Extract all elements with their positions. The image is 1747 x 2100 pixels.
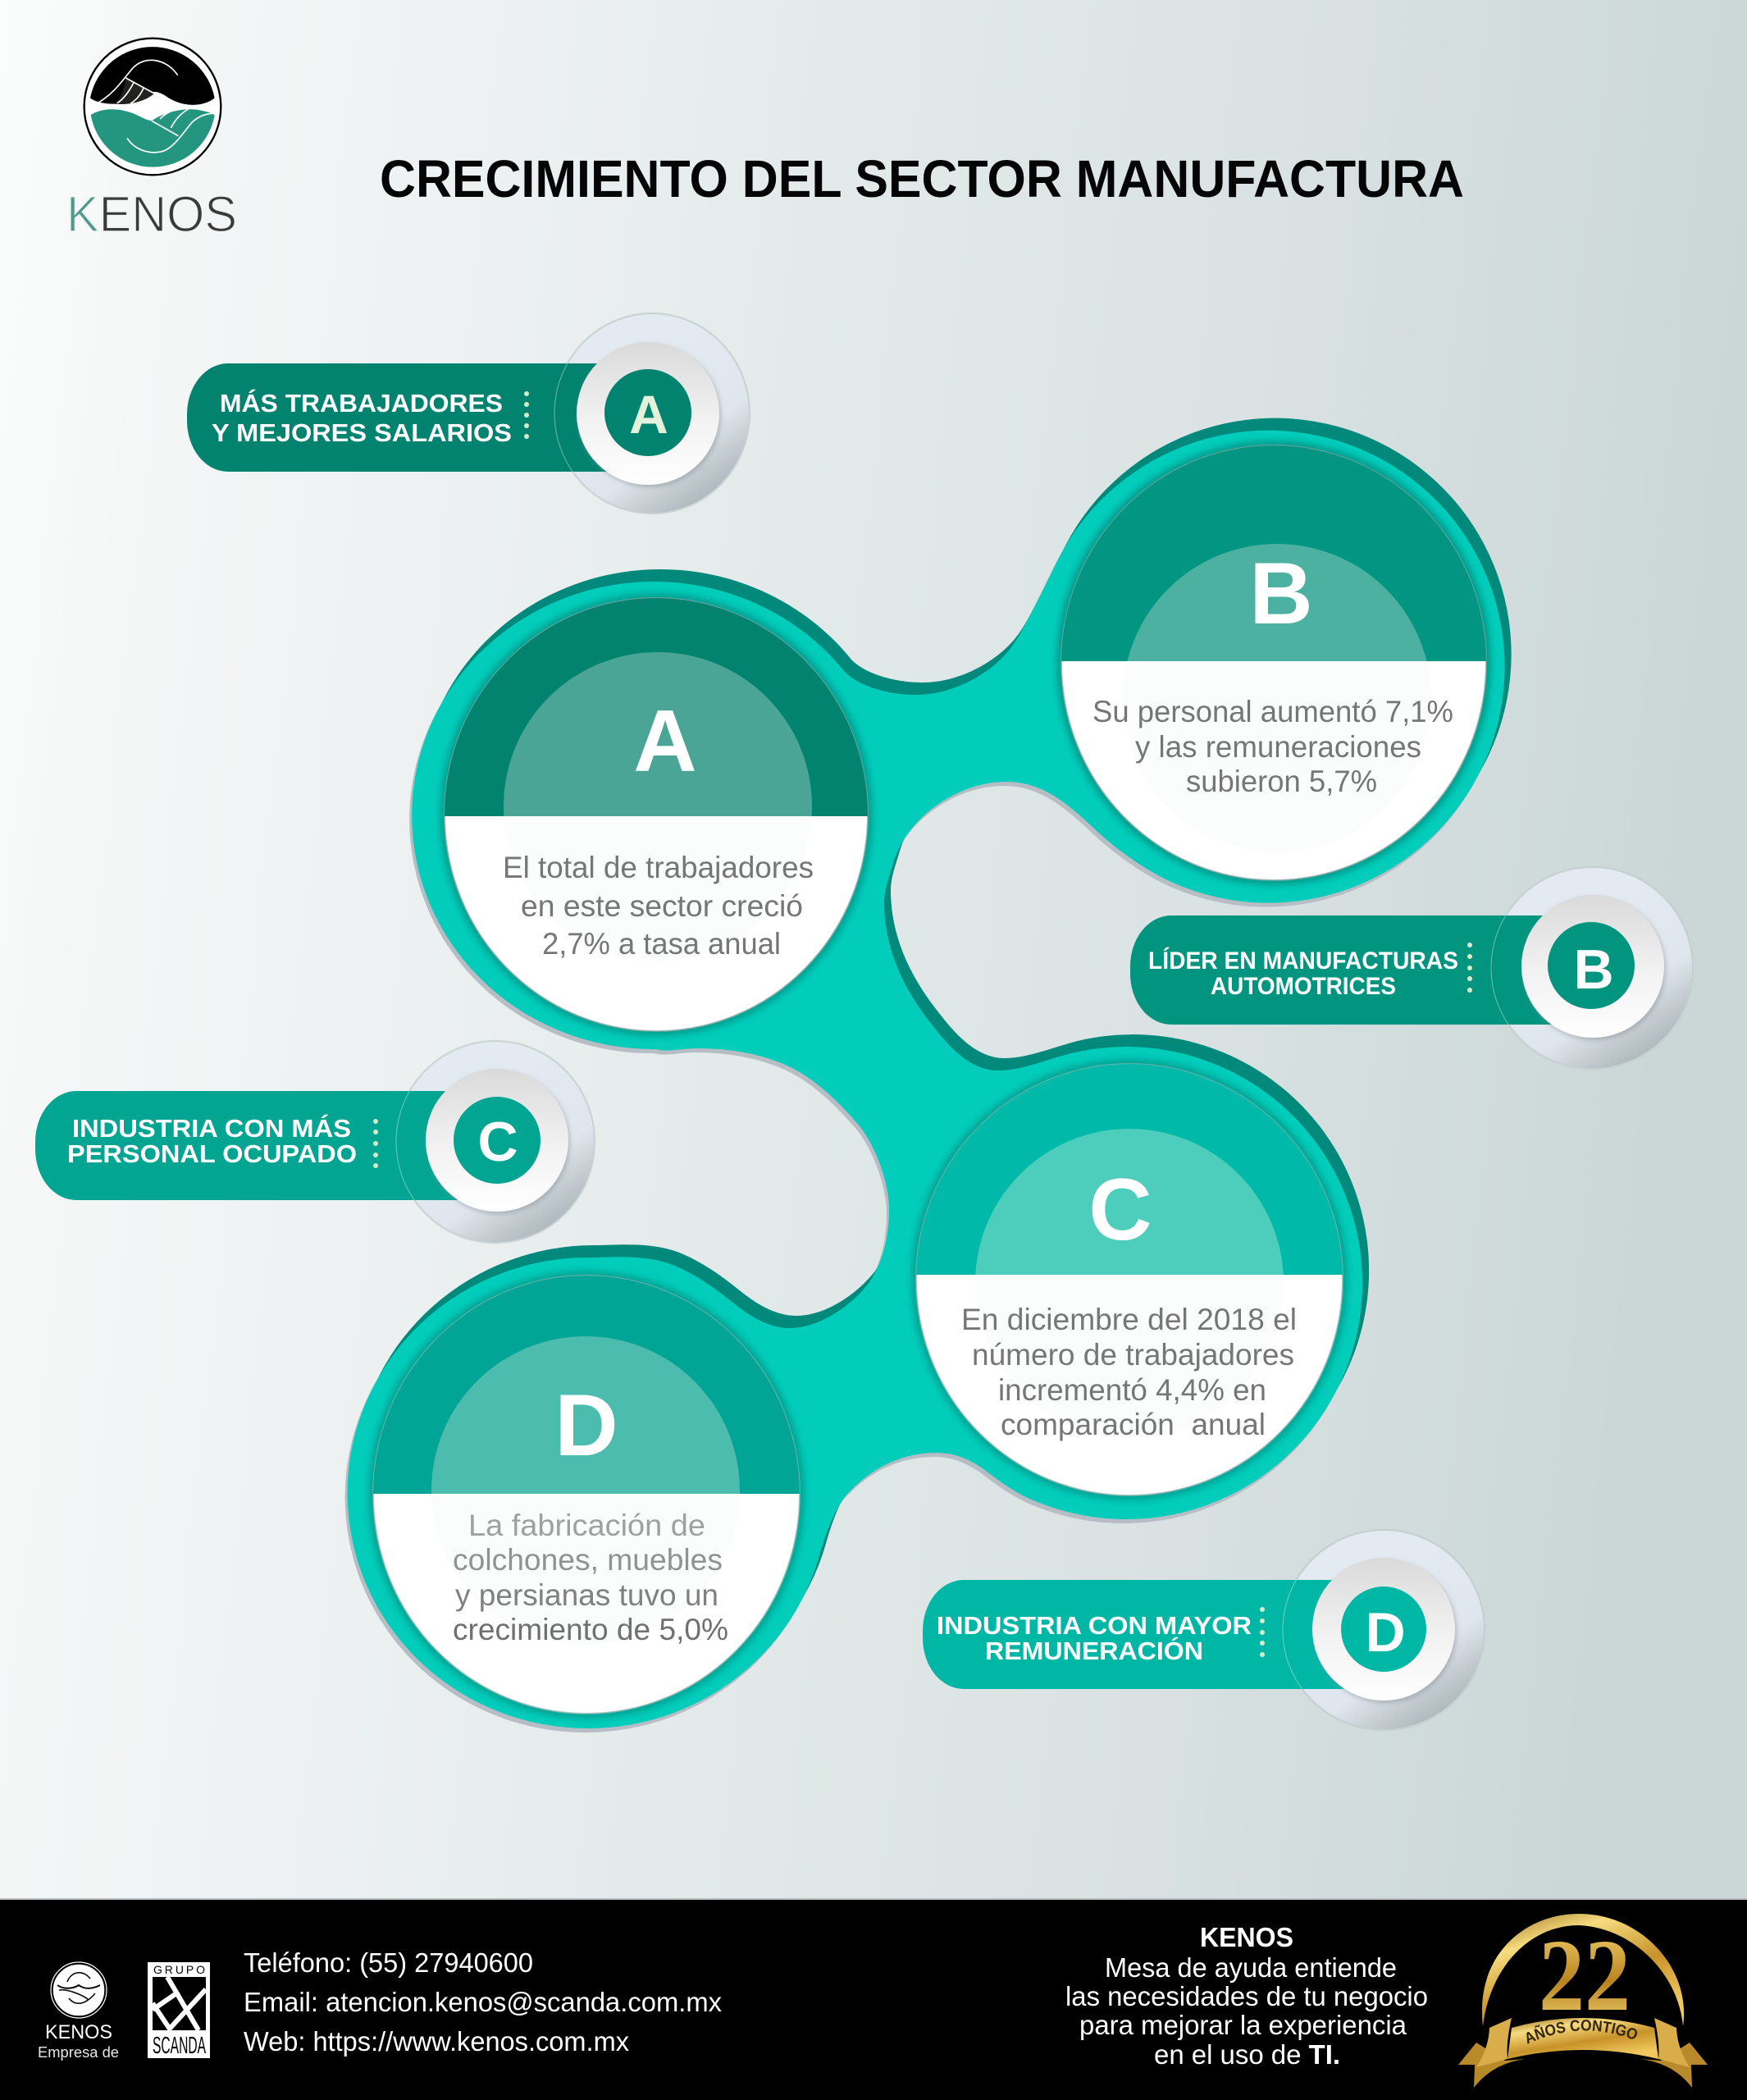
contact details: Teléfono: (55) 27940600 [244,1947,533,1978]
letter A: A [633,692,697,790]
blob edge shadow [345,435,1503,1732]
badge: 22 años contigo: 22 [1539,1920,1631,2033]
footer slogan: KENOS [1200,1922,1293,1952]
text: circle A: en este sector creció [521,889,803,923]
text: circle A: 2,7% a tasa anual [542,927,781,961]
contact details: Web: https://www.kenos.com.mx [244,2026,629,2057]
callout text A: Y MEJORES SALARIOS [212,418,512,447]
logo: Grupo Scanda [148,1962,210,2059]
callout letter B: B [1573,938,1614,1001]
badge: 22 años contigo [1458,1914,1708,2088]
text: circle B: y las remuneraciones [1135,730,1421,764]
text: circle D: crecimiento de 5,0% [453,1613,728,1646]
text: circle C: número de trabajadores [972,1338,1294,1372]
logo emblem [84,39,221,175]
callout letter C: C [477,1111,518,1173]
callout: B [1130,867,1693,1069]
callout: A [187,313,750,514]
footer logo wordmark: KENOS [45,2021,112,2043]
text: circle C: En diciembre del 2018 el [961,1303,1297,1336]
footer slogan: para mejorar la experiencia [1079,2010,1407,2040]
text: circle D: colchones, muebles [453,1543,723,1577]
callout: C [35,1041,595,1243]
text: circle C: comparación anual [1001,1408,1266,1441]
callout text B: AUTOMOTRICES [1211,973,1396,1000]
panel: circle D [368,1271,805,1719]
contact details: Email: atencion.kenos@scanda.com.mx [244,1987,722,2017]
logo wordmark: KENOS [66,186,237,242]
footer slogan: las necesidades de tu negocio [1065,1981,1428,2011]
callout text B: LÍDER EN MANUFACTURAS [1148,947,1458,975]
logo: Grupo Scanda: GRUPO [153,1963,205,1976]
panel: circle C [911,1059,1348,1500]
callout text D: INDUSTRIA CON MAYOR [937,1611,1252,1640]
letter C: C [1088,1160,1152,1258]
text: circle B: subieron 5,7% [1186,765,1377,798]
callout letter A: A [629,384,668,445]
panel: circle B [1056,441,1491,885]
panel: circle A [440,593,873,1036]
text: circle D: La fabricación de [468,1509,705,1542]
callout: D [923,1530,1485,1730]
callout text C: INDUSTRIA CON MÁS [72,1114,351,1143]
letter D: D [554,1376,618,1474]
callout text A: MÁS TRABAJADORES [220,389,503,418]
callout text D: REMUNERACIÓN [985,1636,1203,1665]
text: circle D: y persianas tuvo un [455,1578,718,1612]
title: CRECIMIENTO DEL SECTOR MANUFACTURA [380,149,1464,208]
callout text C: PERSONAL OCUPADO [67,1139,357,1168]
footer slogan: en el uso de TI. [1154,2039,1340,2070]
footer [0,1898,1747,2100]
logo: Grupo Scanda: SCANDA [153,2033,206,2059]
badge: 22 años contigo: AÑOS CONTIGO [1526,2020,1637,2044]
letter B: B [1249,544,1313,642]
logo: Kenos [66,39,237,242]
blob teal body [348,431,1505,1728]
text: circle B: Su personal aumentó 7,1% [1092,695,1453,728]
text: empresa de: Empresa de [38,2044,119,2061]
text: circle C: incrementó 4,4% en [998,1373,1266,1407]
connected circles diagram [345,418,1512,1732]
text: circle A: El total de trabajadores [503,851,814,884]
callout letter D: D [1365,1601,1406,1664]
footer logo: Kenos white [45,1962,112,2043]
blob dark edge [354,418,1512,1716]
footer slogan: Mesa de ayuda entiende [1105,1952,1397,1983]
